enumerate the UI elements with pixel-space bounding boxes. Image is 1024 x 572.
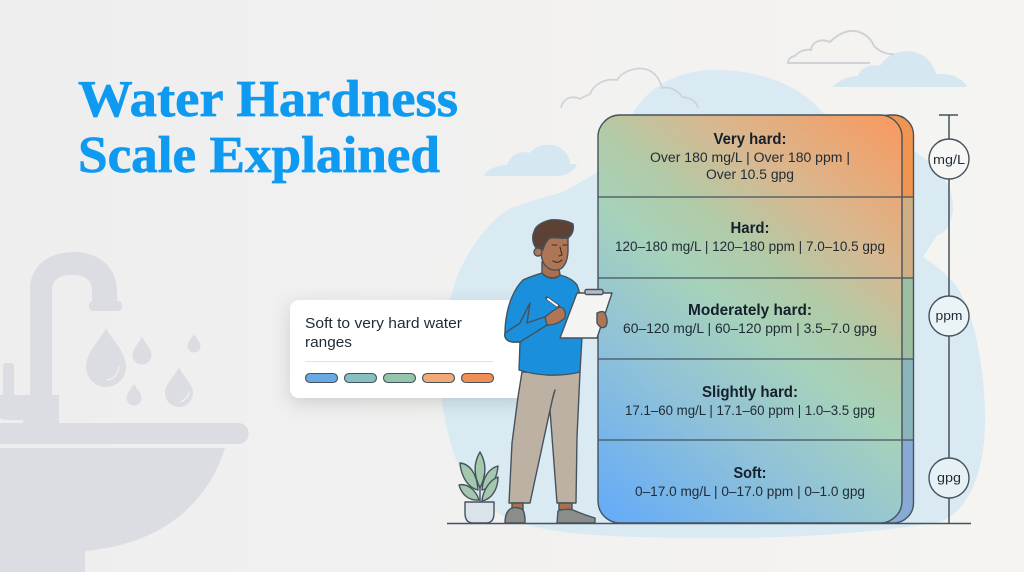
- title: Scale Explained: [78, 127, 440, 184]
- shoes: [505, 508, 595, 523]
- panel: hardness scale: [598, 115, 914, 523]
- unit: mg/L: [929, 139, 969, 179]
- legs: [509, 372, 580, 503]
- ankles: [512, 503, 572, 510]
- row: very hard: Over 10.5 gpg: [706, 167, 794, 182]
- panel front face: [598, 115, 902, 523]
- row: soft: Soft:: [734, 465, 766, 482]
- hair: [533, 220, 573, 250]
- callout card: [290, 300, 530, 398]
- neck: [542, 262, 560, 278]
- row: hard: [615, 220, 885, 254]
- unit: ppm: [929, 296, 969, 336]
- cloud: filled right: [833, 51, 967, 87]
- cloud: outline right: [788, 31, 894, 63]
- sweater: [505, 273, 582, 375]
- illustration: person with clipboard: [505, 220, 612, 523]
- icon: water drops: [86, 328, 200, 407]
- face features: [552, 245, 567, 262]
- title: Water Hardness: [78, 71, 458, 128]
- row: moderately hard: 60–120 mg/L | 60–120 ppm | 3.5–7.0 gpg: [623, 321, 877, 336]
- row: slightly hard: Slightly hard:: [702, 384, 798, 401]
- units axis: [447, 115, 971, 524]
- panel back edge: [888, 116, 913, 522]
- callout card: ranges: [305, 335, 352, 351]
- head: [541, 234, 568, 270]
- legend pills: [306, 374, 494, 382]
- background blob: [441, 70, 985, 538]
- cloud: filled left: [484, 145, 577, 176]
- unit: mg/L: mg/L: [933, 152, 965, 167]
- hand with pen: [547, 298, 558, 306]
- row: slightly hard: 17.1–60 mg/L | 17.1–60 ppm | 1.0–3.5 gpg: [625, 403, 875, 418]
- row: hard: 120–180 mg/L | 120–180 ppm | 7.0–10.5 gpg: [615, 239, 885, 254]
- row: slightly hard: [625, 384, 875, 418]
- row: moderately hard: Moderately hard:: [688, 302, 812, 319]
- unit: gpg: [929, 458, 969, 498]
- icon: potted plant: [459, 452, 498, 523]
- unit: gpg: gpg: [937, 470, 961, 485]
- clipboard: [560, 293, 612, 338]
- callout card: Soft to very hard water: [305, 316, 462, 332]
- row: hard: Hard:: [730, 220, 770, 237]
- arm crease and forearm: [505, 303, 547, 342]
- unit: ppm: ppm: [936, 308, 962, 323]
- row: very hard: [650, 131, 850, 182]
- row: soft: 0–17.0 mg/L | 0–17.0 ppm | 0–1.0 gpg: [635, 484, 865, 499]
- title: [78, 71, 458, 184]
- row: moderately hard: [623, 302, 877, 336]
- row: very hard: Very hard:: [714, 131, 786, 148]
- ear: [534, 248, 542, 256]
- clipboard clip: [585, 290, 603, 294]
- cloud: outline left: [561, 69, 698, 108]
- row: soft: [635, 465, 865, 499]
- row: very hard: Over 180 mg/L | Over 180 ppm |: [650, 150, 850, 165]
- icon: faucet and sink: [0, 252, 248, 572]
